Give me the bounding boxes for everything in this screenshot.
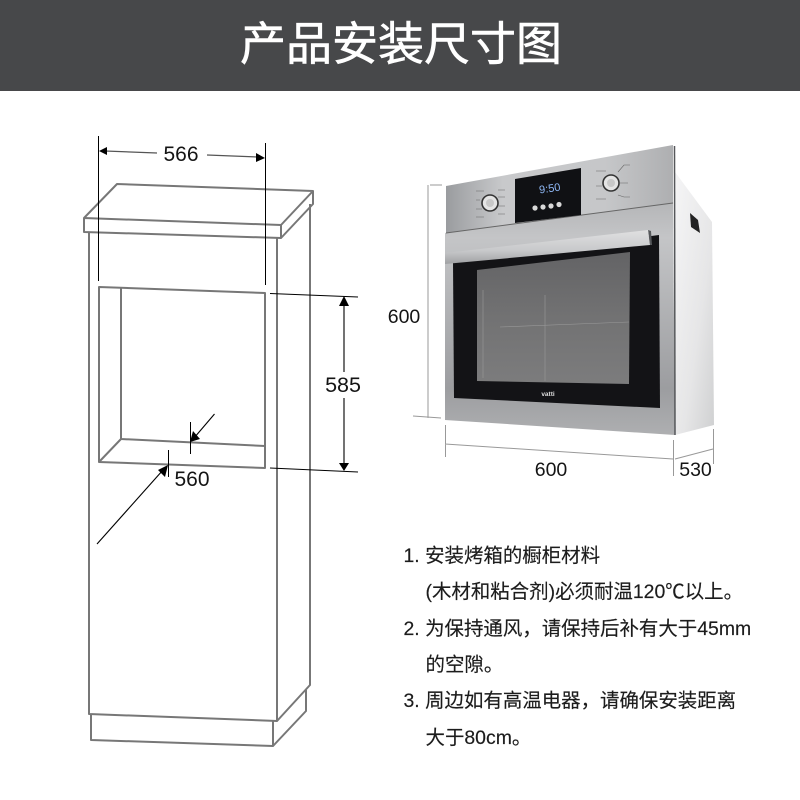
- label: oven width: 600: [535, 459, 567, 481]
- installation notes: 2. 为保持通风，请保持后补有大于45mm: [404, 618, 751, 640]
- right knob: [603, 175, 619, 191]
- cabinet line drawing: [84, 184, 313, 746]
- display: [515, 168, 581, 223]
- dimension: width 566: [98, 136, 266, 285]
- installation notes: 大于80cm。: [426, 727, 531, 749]
- label: oven height: 600: [388, 306, 420, 328]
- header band: [0, 0, 800, 91]
- installation notes: 的空隙。: [426, 654, 503, 676]
- buttons: [532, 202, 562, 211]
- door frame: [453, 235, 660, 408]
- dimension: height 585: 585: [325, 373, 361, 397]
- oven front body: [445, 203, 675, 435]
- dimension: depth 560: 560: [174, 468, 210, 491]
- brand: vatti: [541, 391, 555, 398]
- oven product image: [388, 145, 714, 481]
- front right edge: [674, 146, 676, 435]
- title: 产品安装尺寸图: [240, 18, 562, 70]
- cabinet diagram: [84, 136, 364, 746]
- door handle: [445, 230, 652, 264]
- control panel: [446, 145, 673, 233]
- installation notes: (木材和粘合剂)必须耐温120℃以上。: [426, 581, 743, 603]
- oven dimension lines: [413, 185, 714, 476]
- installation notes: 3. 周边如有高温电器，请确保安装距离: [404, 690, 736, 712]
- dimension: height 585: [270, 294, 364, 472]
- side vent slot: [690, 213, 700, 233]
- installation notes: [404, 545, 751, 749]
- door glass: [477, 252, 630, 384]
- dimension: width 566: 566: [163, 143, 199, 166]
- clock readout: 9:50: [538, 182, 561, 196]
- installation notes: 1. 安装烤箱的橱柜材料: [404, 545, 600, 567]
- dimension: depth 560: [97, 414, 214, 544]
- dial markings: [476, 165, 630, 217]
- label: oven depth: 530: [679, 459, 712, 481]
- left knob: [482, 195, 498, 211]
- oven side: [675, 172, 714, 435]
